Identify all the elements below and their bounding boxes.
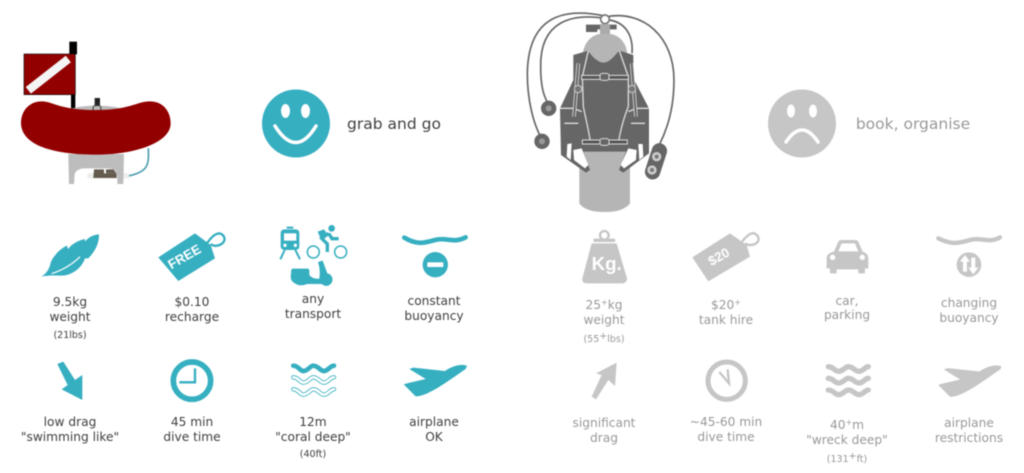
item: airplane	[935, 365, 1003, 445]
item: dive time	[163, 362, 221, 444]
item: airplane	[404, 365, 467, 444]
label: airplane restrictions: restrictions	[935, 431, 1003, 445]
item: depth	[275, 366, 351, 460]
item: drag	[573, 363, 636, 445]
heading: book, organise: book, organise	[856, 115, 970, 133]
item: tank hire	[692, 233, 759, 327]
label: 40+m wreck deep: m	[852, 418, 864, 432]
label: $20+ tank hire: +	[734, 298, 741, 307]
label: constant buoyancy: constant	[408, 294, 460, 308]
label: 9.5kg weight: (21lbs)	[53, 330, 87, 341]
label: 40+m wreck deep: ft)	[857, 454, 867, 465]
label: car, parking: parking	[824, 308, 870, 322]
icon: happy face	[262, 90, 330, 158]
label: changing buoyancy: changing	[941, 296, 997, 310]
item: transport	[280, 225, 347, 321]
icon: sad face	[768, 90, 836, 158]
item: weight	[582, 231, 627, 345]
label: constant buoyancy: buoyancy	[404, 309, 464, 323]
label: low drag: low drag	[44, 415, 96, 429]
label: 9.5kg weight: weight	[49, 310, 91, 324]
icon: feather	[42, 234, 99, 277]
label: airplane OK: OK	[425, 430, 444, 444]
label: 25+kg weight: (55	[583, 331, 625, 345]
icon: up-right arrow	[592, 363, 617, 399]
item: drag	[21, 362, 119, 444]
label: 45 min dive time: dive time	[163, 430, 221, 444]
label: airplane restrictions: airplane	[944, 416, 994, 430]
label: 25+kg weight: +	[599, 331, 607, 342]
item: recharge	[158, 233, 225, 324]
icon: free tag: FREE	[165, 241, 204, 272]
label: any transport: any	[302, 292, 324, 306]
icon: airplane	[938, 365, 1001, 397]
label: $20+ tank hire: tank hire	[699, 313, 753, 327]
item: depth	[806, 367, 888, 465]
label: 25+kg weight: kg	[608, 298, 623, 312]
item: buoyancy	[404, 237, 466, 323]
label: 45-60 min dive time: dive time	[697, 430, 755, 444]
label: car, parking: car,	[835, 294, 859, 308]
item: weight	[42, 234, 99, 341]
icon: train, bicycle, scooter	[280, 225, 347, 286]
heading: grab and go: grab and go	[347, 115, 441, 133]
label: significant drag: drag	[590, 431, 618, 445]
label: 25+kg weight: lbs)	[607, 334, 625, 345]
label: 40+m wreck deep: +	[845, 418, 852, 427]
icon: kg weight: Kg.	[592, 253, 622, 274]
label: changing buoyancy: buoyancy	[939, 311, 999, 325]
item: car	[824, 240, 870, 322]
panel: left device	[21, 42, 467, 460]
icon: car	[827, 240, 868, 273]
label: low drag: "swimming like"	[21, 430, 119, 444]
label: 12m coral deep: 12m	[299, 415, 327, 429]
icon: waves	[828, 367, 868, 395]
icon: airplane	[404, 365, 467, 396]
label: airplane OK: airplane	[409, 415, 459, 429]
label: any transport: transport	[285, 307, 341, 321]
icon: changing buoyancy	[938, 237, 1000, 277]
label: $0.10 recharge: $0.10	[175, 295, 209, 309]
label: 40+m wreck deep: 40	[830, 418, 845, 432]
icon: clock	[708, 362, 745, 399]
item: buoyancy	[938, 237, 1000, 325]
illustration: buoy with dive flag	[21, 42, 171, 184]
panel: right scuba gear	[527, 13, 1003, 465]
label: 25+kg weight: 25	[585, 298, 601, 312]
label: 12m coral deep: (40ft)	[300, 449, 326, 460]
label: 25+kg weight: +	[601, 298, 608, 307]
label: 40+m wreck deep: "wreck deep"	[806, 433, 888, 447]
label: $0.10 recharge: recharge	[165, 310, 219, 324]
icon: constant buoyancy	[404, 237, 466, 277]
label: 40+m wreck deep: +	[849, 451, 857, 462]
label: significant drag: significant	[573, 416, 635, 430]
label: 25+kg weight: weight	[583, 313, 625, 327]
label: $20+ tank hire: $20	[711, 298, 734, 312]
item: dive time	[690, 362, 762, 444]
label: 40+m wreck deep: (131	[827, 451, 867, 465]
icon: clock	[173, 362, 211, 399]
icon: $20 tag: $20	[705, 245, 732, 269]
label: 45-60 min dive time: ~45-60 min	[690, 415, 762, 429]
label: 9.5kg weight: 9.5kg	[53, 295, 87, 309]
icon: waves	[293, 366, 334, 395]
label: 12m coral deep: "coral deep"	[275, 430, 351, 444]
illustration: scuba set	[527, 13, 674, 212]
label: 45 min dive time: 45 min	[171, 415, 213, 429]
icon: down-right arrow	[57, 362, 82, 400]
